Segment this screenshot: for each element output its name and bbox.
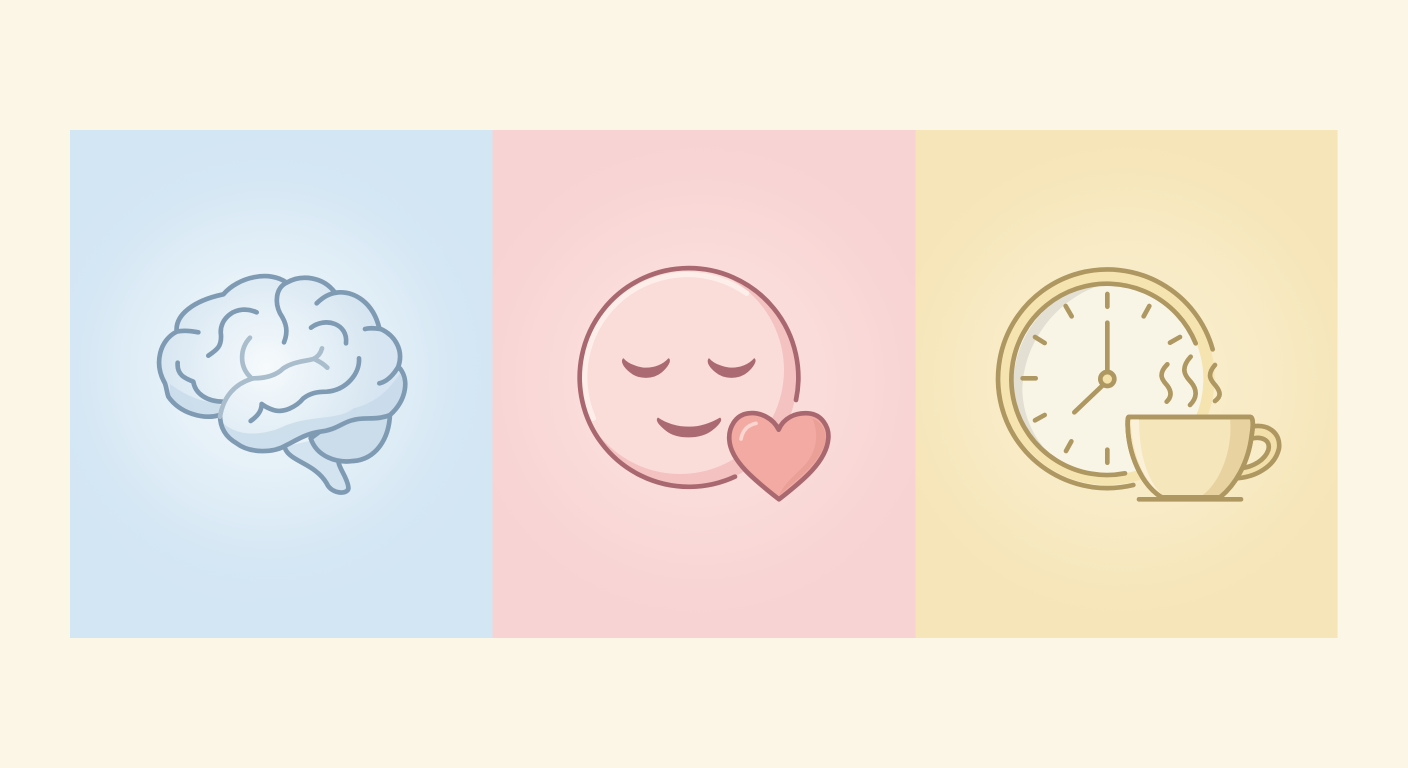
cup outline: [1128, 417, 1253, 497]
tick marks: [1023, 294, 1180, 463]
clock hands: [1100, 323, 1114, 372]
lower lobe shading: [170, 373, 403, 451]
steam: [1162, 357, 1220, 405]
upper cerebrum fill: [159, 276, 405, 451]
handle: [1235, 426, 1279, 478]
cerebellum: [311, 413, 390, 461]
sulci: [177, 283, 398, 421]
panel background: pink: [492, 130, 916, 638]
clock hub: [1100, 372, 1114, 386]
panel: face: [492, 130, 916, 638]
infographic canvas: [70, 130, 1338, 638]
inner ring: [1011, 284, 1196, 475]
cup highlight: [1131, 419, 1162, 494]
face shadow: [1013, 284, 1107, 455]
brain stem outline: [285, 448, 348, 493]
closed eyes: [623, 359, 669, 377]
icon: clock: [998, 269, 1215, 488]
saucer: [1139, 492, 1241, 506]
brain stem fill: [285, 440, 348, 493]
cup body: [1128, 417, 1253, 497]
clock rim: [1000, 270, 1215, 485]
face outline: [580, 268, 798, 487]
icon: smiling face with heart: [576, 266, 828, 499]
panel: brain: [70, 130, 492, 638]
heart: [729, 413, 828, 499]
cup shading: [1202, 419, 1251, 496]
face fill with shading and highlight: [576, 266, 797, 487]
panel background: yellow: [916, 130, 1338, 638]
icon: brain: [159, 276, 405, 493]
panel background: blue: [70, 130, 492, 638]
outer ring: [998, 269, 1213, 488]
clock face: [1011, 283, 1203, 475]
smile: [657, 418, 721, 437]
icon: coffee cup: [1128, 357, 1279, 499]
outer contour: [159, 276, 405, 451]
panel: clock and coffee: [916, 130, 1338, 638]
